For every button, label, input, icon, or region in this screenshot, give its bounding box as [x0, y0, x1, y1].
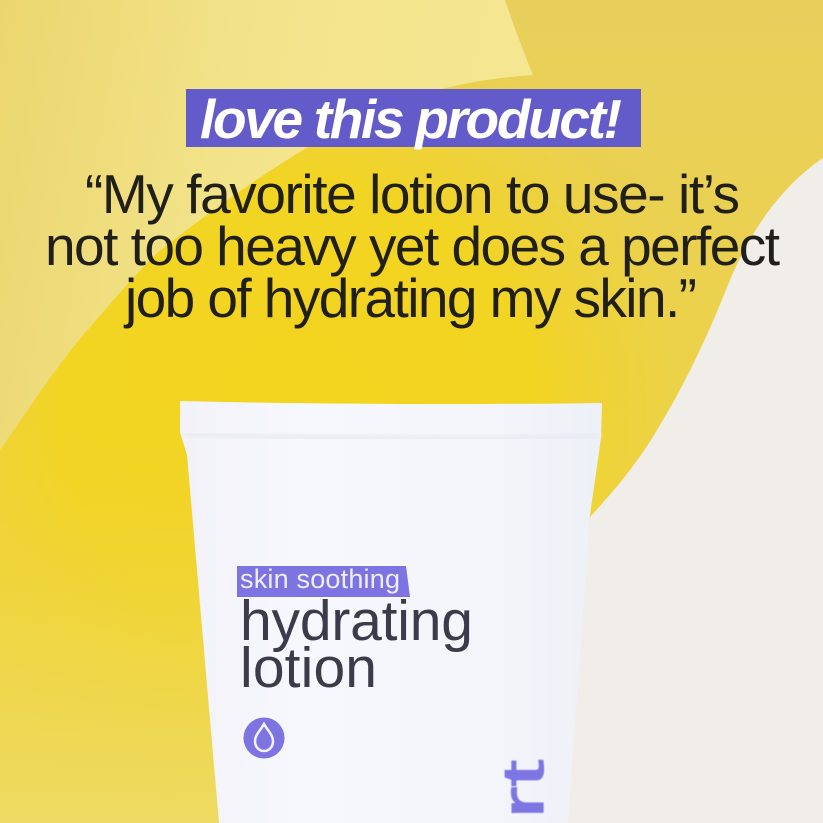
- customer quote: not too heavy yet does a perfect: [45, 215, 780, 277]
- customer quote: [45, 163, 780, 329]
- tube crimp seam: [184, 434, 600, 438]
- pale yellow paper fold: [0, 0, 533, 450]
- customer quote: “My favorite lotion to use- it’s: [85, 163, 740, 225]
- vertical brand text: rt: [490, 760, 555, 818]
- tag: skin soothing: skin soothing: [240, 564, 400, 594]
- customer quote: job of hydrating my skin.”: [123, 267, 697, 329]
- product name: hydrating: [240, 589, 473, 653]
- lower left yellow paper: [0, 380, 230, 823]
- cream paper: [560, 158, 823, 823]
- product name: [240, 589, 473, 700]
- product name: lotion: [240, 636, 377, 700]
- badge: love this product: love this product!: [200, 88, 622, 150]
- icon: water drop: [244, 718, 284, 758]
- product tube: [180, 401, 602, 823]
